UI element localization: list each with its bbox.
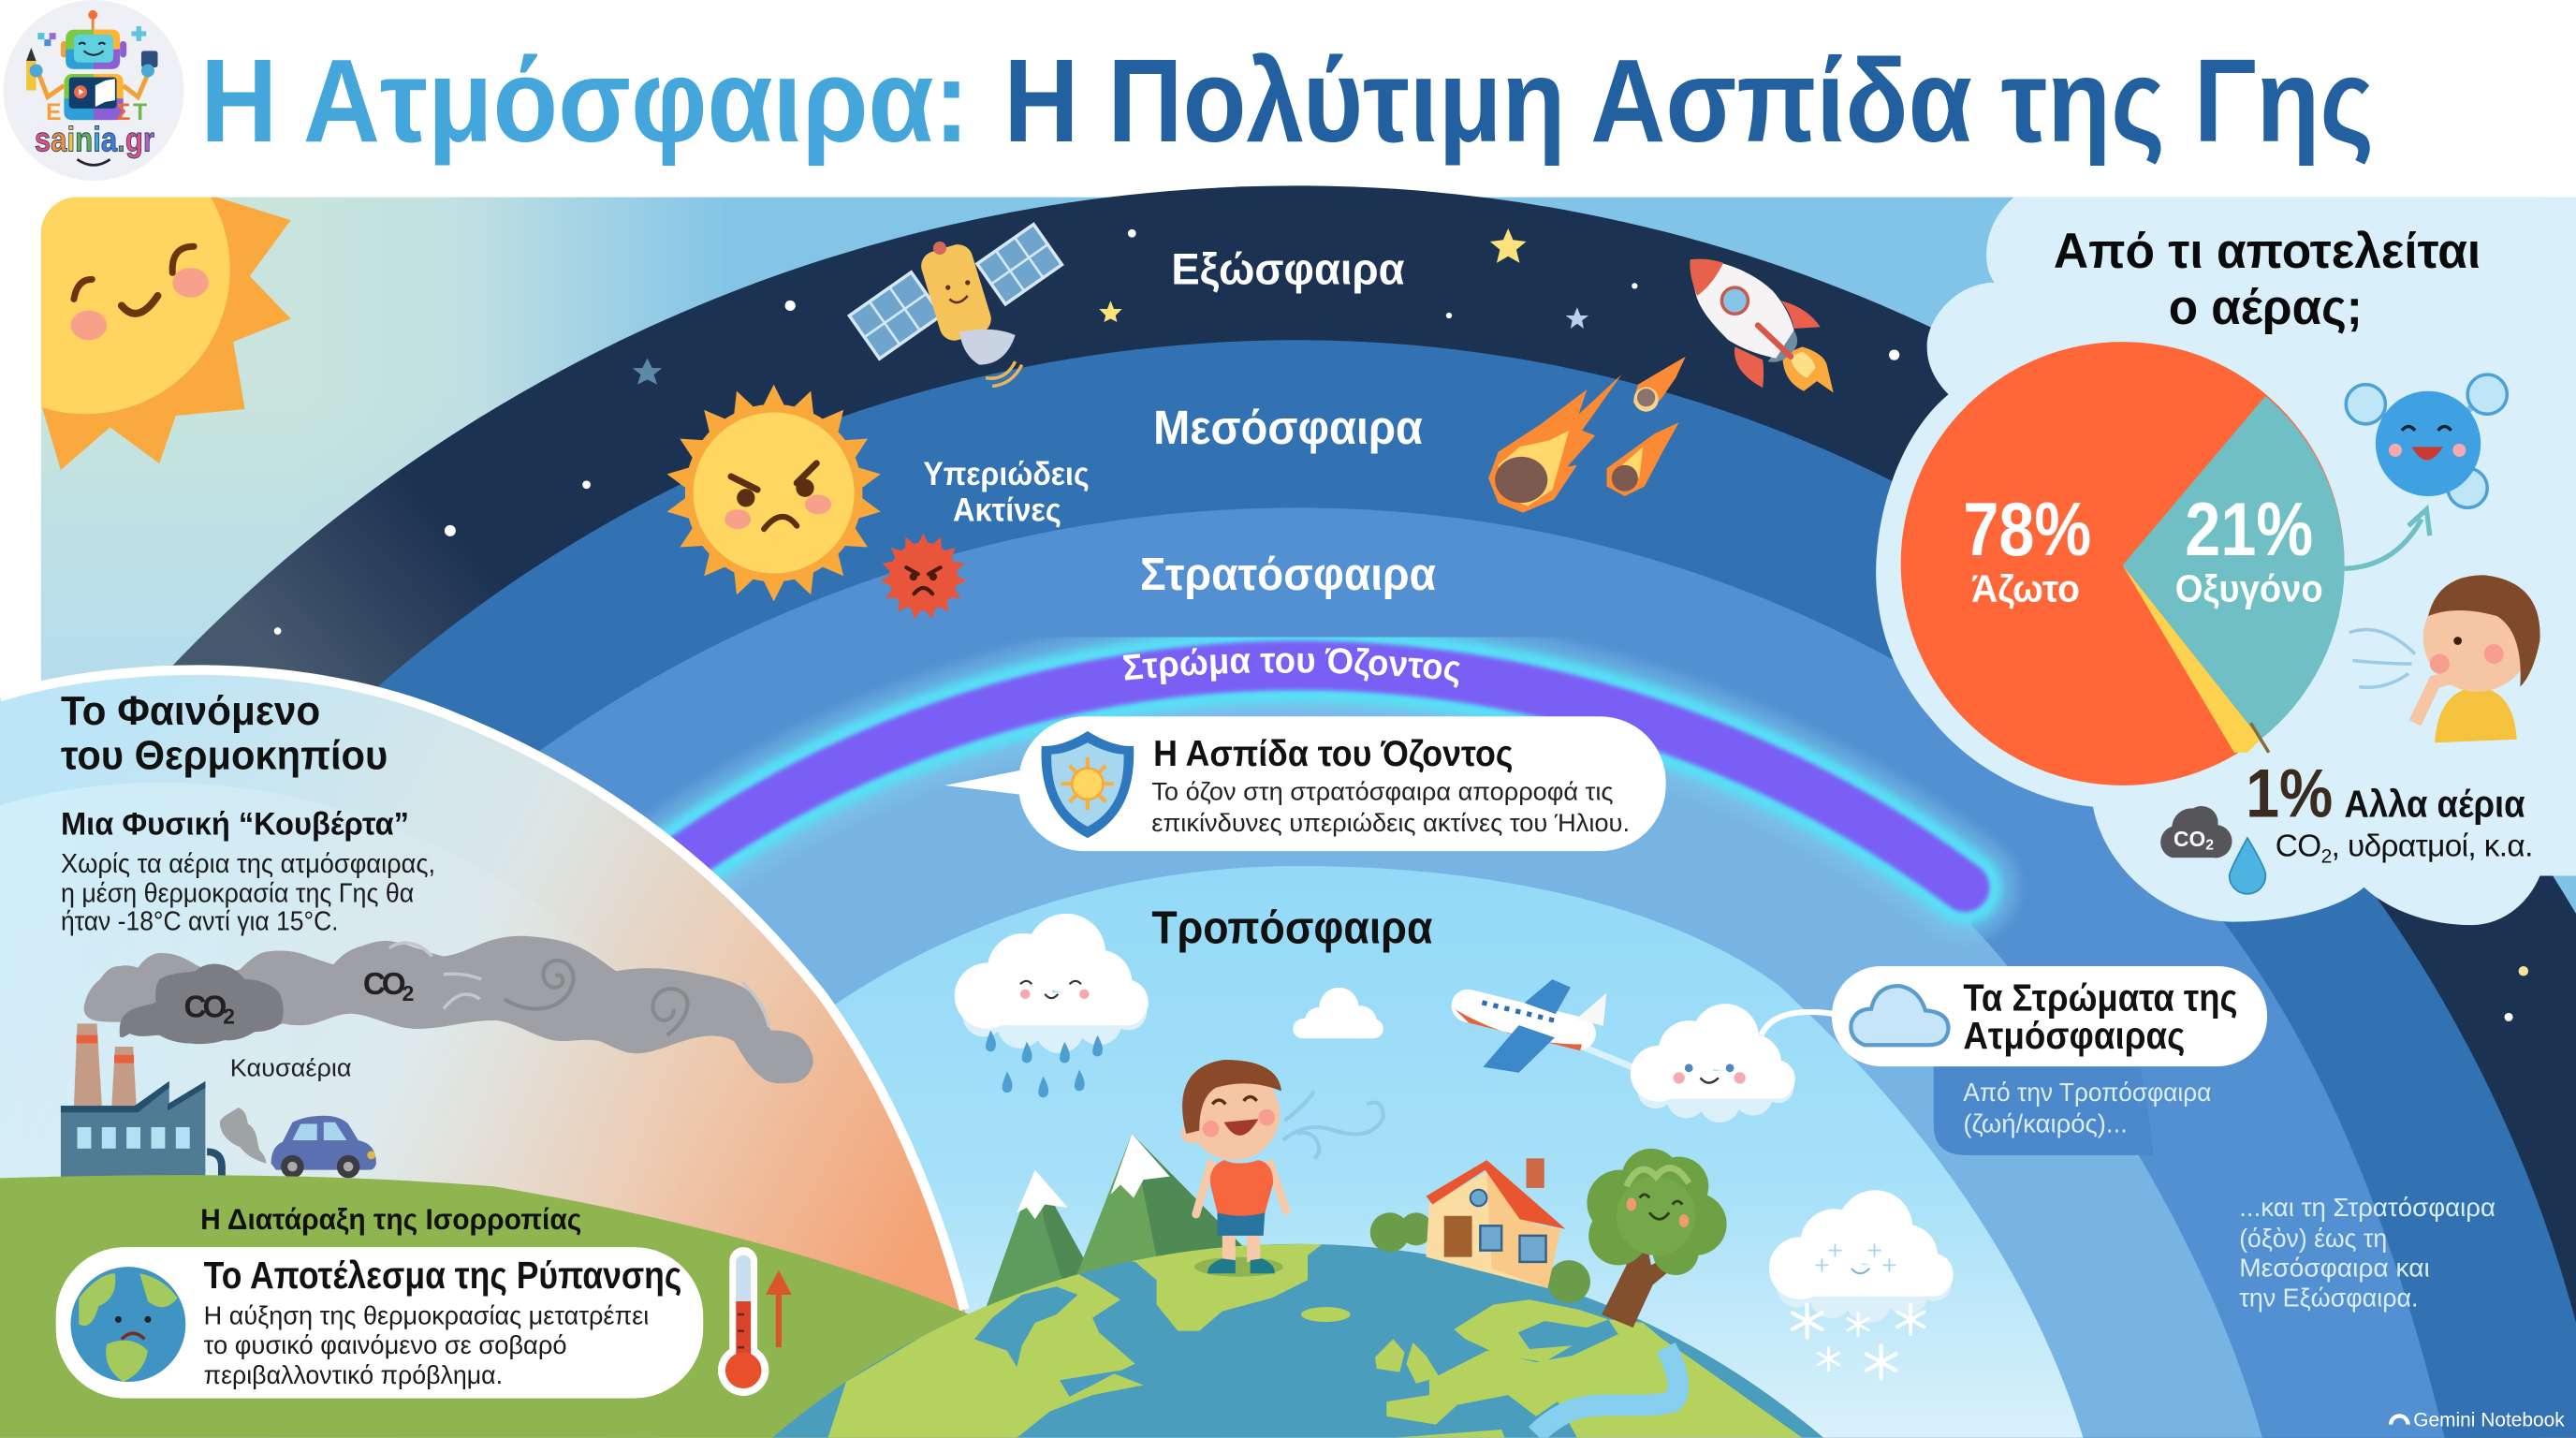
title: Η Ατμόσφαιρα:	[200, 35, 970, 167]
green hill	[0, 1175, 1018, 1438]
label: CO2: 2	[223, 1004, 235, 1028]
icon: meteors	[1488, 357, 1686, 513]
label: exhaust: Καυσαέρια	[230, 1054, 352, 1082]
band: mesosphere	[0, 340, 2576, 1438]
icon: thermometer	[718, 1247, 792, 1396]
ocean inlets	[974, 1286, 1554, 1438]
logo: sainia.gr: Ε	[46, 100, 62, 125]
text: and the stratosphere: την Εξώσφαιρα.	[2239, 1283, 2419, 1312]
smoke plume	[84, 936, 813, 1083]
pie chart: 78%	[1963, 488, 2091, 572]
callout: layers of the atmosphere	[1761, 966, 2267, 1066]
logo: sainia.gr: Σ	[117, 100, 130, 125]
icon: car	[220, 1108, 376, 1178]
panel: greenhouse effect	[0, 670, 1018, 1438]
icon: rocket	[1690, 259, 1834, 392]
globe: Earth	[772, 1244, 1823, 1438]
callout: layers of the atmosphere: Ατμόσφαιρας	[1963, 1014, 2185, 1057]
icon: snow cloud	[1769, 1190, 1954, 1379]
text: from the troposphere	[1963, 1078, 2211, 1137]
icon: CO2 cloud and drop	[2160, 806, 2265, 894]
pie chart: 21%	[2185, 488, 2313, 572]
icon: happy cloud	[1631, 1004, 1795, 1123]
stars and dots	[274, 228, 2528, 1021]
title: Η Πολύτιμη Ασπίδα της Γης	[1003, 35, 2374, 167]
icon: satellite	[849, 225, 1061, 386]
land masses	[828, 1244, 1802, 1438]
icon: small cloud	[1293, 988, 1383, 1038]
icon: rain cloud	[955, 914, 1149, 1097]
text: and the stratosphere: (όξὸν) έως τη	[2239, 1224, 2387, 1253]
icon: shield	[1042, 731, 1134, 838]
text: from the troposphere: Από την Τροπόσφαιρα	[1963, 1078, 2211, 1107]
label: Μεσόσφαιρα: Μεσόσφαιρα	[1153, 401, 1423, 454]
icon: CO2 cloud and drop: CO	[2174, 827, 2205, 851]
text: and the stratosphere	[2239, 1193, 2496, 1312]
heading: greenhouse	[61, 688, 388, 778]
river	[1536, 1347, 1678, 1434]
band: stratosphere	[48, 507, 2445, 1438]
arrow: oxygen to molecule	[2345, 509, 2430, 568]
label: Εξώσφαιρα: Εξώσφαιρα	[1171, 245, 1405, 295]
label: Στρατόσφαιρα: Στρατόσφαιρα	[1140, 550, 1436, 600]
text: blanket description: Χωρίς τα αέρια της ατμόσφαιρας,	[61, 849, 435, 879]
label: 1% other gases: 2	[2321, 845, 2332, 867]
subheading: disturbance of balance: Η Διατάραξη της Ισορροπίας	[200, 1202, 581, 1236]
icon: boy breathing	[2349, 575, 2540, 742]
heading: greenhouse: του Θερμοκηπίου	[61, 732, 388, 778]
heading: what air is made of: ο αέρας;	[2169, 280, 2363, 335]
icon: tree	[1587, 1149, 1727, 1328]
text: and the stratosphere: Μεσόσφαιρα και	[2239, 1254, 2430, 1283]
subheading: natural blanket: Μια Φυσική “Κουβέρτα”	[61, 807, 409, 843]
callout: ozone shield	[944, 716, 1666, 851]
text: and the stratosphere: ...και τη Στρατόσφαιρα	[2239, 1193, 2496, 1222]
label: 1% other gases: Αλλα αέρια	[2345, 782, 2525, 825]
callout: layers of the atmosphere: Τα Στρώματα της	[1963, 976, 2237, 1019]
label: Στρώμα του Όζοντος: Στρώμα του Όζοντος	[1123, 648, 1460, 688]
callout: result of pollution: το φυσικό φαινόμενο σε σοβαρό	[204, 1330, 567, 1359]
text: blanket description: η μέση θερμοκρασία της Γης θα	[61, 879, 414, 909]
label: Υπεριώδεις Ακτίνες: Ακτίνες	[953, 492, 1061, 528]
label: CO2: CO	[184, 990, 227, 1024]
callout: ozone shield: Το όζον στη στρατόσφαιρα απορροφά τις	[1151, 777, 1614, 806]
logo: sainia.gr: sainia.gr	[35, 120, 154, 158]
text: from the troposphere: (ζωή/καιρός)...	[1963, 1108, 2128, 1137]
heading: what air is made of: Από τι αποτελείται	[2054, 224, 2481, 279]
icon: angry sun	[665, 385, 884, 601]
icon: sad earth	[70, 1267, 185, 1382]
icon: house	[1370, 1158, 1590, 1303]
label: 1% other gases	[2246, 754, 2533, 867]
band: lower stratosphere	[266, 666, 2262, 1438]
icon: mountains	[983, 1134, 1249, 1318]
pie chart: Άζωτο	[1971, 566, 2080, 609]
label: 1% other gases: CO	[2276, 829, 2321, 863]
heading: what air is made of	[2054, 224, 2481, 335]
icon: airplane	[1439, 957, 1659, 1105]
heading: greenhouse: Το Φαινόμενο	[61, 688, 320, 734]
callout: ozone shield: Η Ασπίδα του Όζοντος	[1153, 734, 1513, 774]
box under layers callout	[1934, 1051, 2154, 1155]
label: CO2: CO	[363, 967, 406, 1002]
label: 1% other gases: 1%	[2246, 754, 2333, 831]
panel: air composition cloud	[1876, 198, 2576, 925]
icon: UV ray	[880, 534, 967, 621]
logo: sainia.gr: Τ	[133, 100, 147, 125]
label: Τροπόσφαιρα: Τροπόσφαιρα	[1151, 902, 1432, 953]
text: blanket description	[61, 849, 435, 936]
icon: oxygen molecule	[2346, 374, 2507, 507]
callout: result of pollution: Το Αποτέλεσμα της Ρύπανσης	[204, 1254, 681, 1297]
callout: ozone shield: επικίνδυνες υπεριώδεις ακτίνες του Ήλιου.	[1151, 808, 1630, 837]
label: 1% other gases: , υδρατμοί, κ.α.	[2332, 829, 2533, 863]
watermark: Gemini Notebook: Gemini Notebook	[2413, 1409, 2565, 1431]
callout: result of pollution: Η αύξηση της θερμοκρασίας μετατρέπει	[204, 1301, 649, 1330]
callout: result of pollution: περιβαλλοντικό πρόβλημα.	[204, 1360, 503, 1389]
ozone layer band	[575, 666, 1965, 945]
pie chart	[1901, 342, 2345, 785]
label: Υπεριώδεις Ακτίνες	[923, 456, 1090, 528]
icon: CO2 cloud and drop: 2	[2205, 837, 2214, 853]
label: CO2: 2	[402, 981, 414, 1005]
troposphere	[657, 866, 2083, 1438]
callout: result of pollution	[56, 1247, 703, 1399]
logo: sainia.gr	[4, 0, 184, 181]
icon: factory	[61, 1023, 222, 1178]
title	[200, 35, 2374, 167]
pie chart: Οξυγόνο	[2175, 566, 2323, 609]
label: Υπεριώδεις Ακτίνες: Υπεριώδεις	[923, 456, 1090, 492]
icon: smiling sun	[41, 197, 291, 470]
text: blanket description: ήταν -18°C αντί για 15°C.	[61, 906, 339, 936]
icon: child breathing	[1181, 1060, 1383, 1277]
